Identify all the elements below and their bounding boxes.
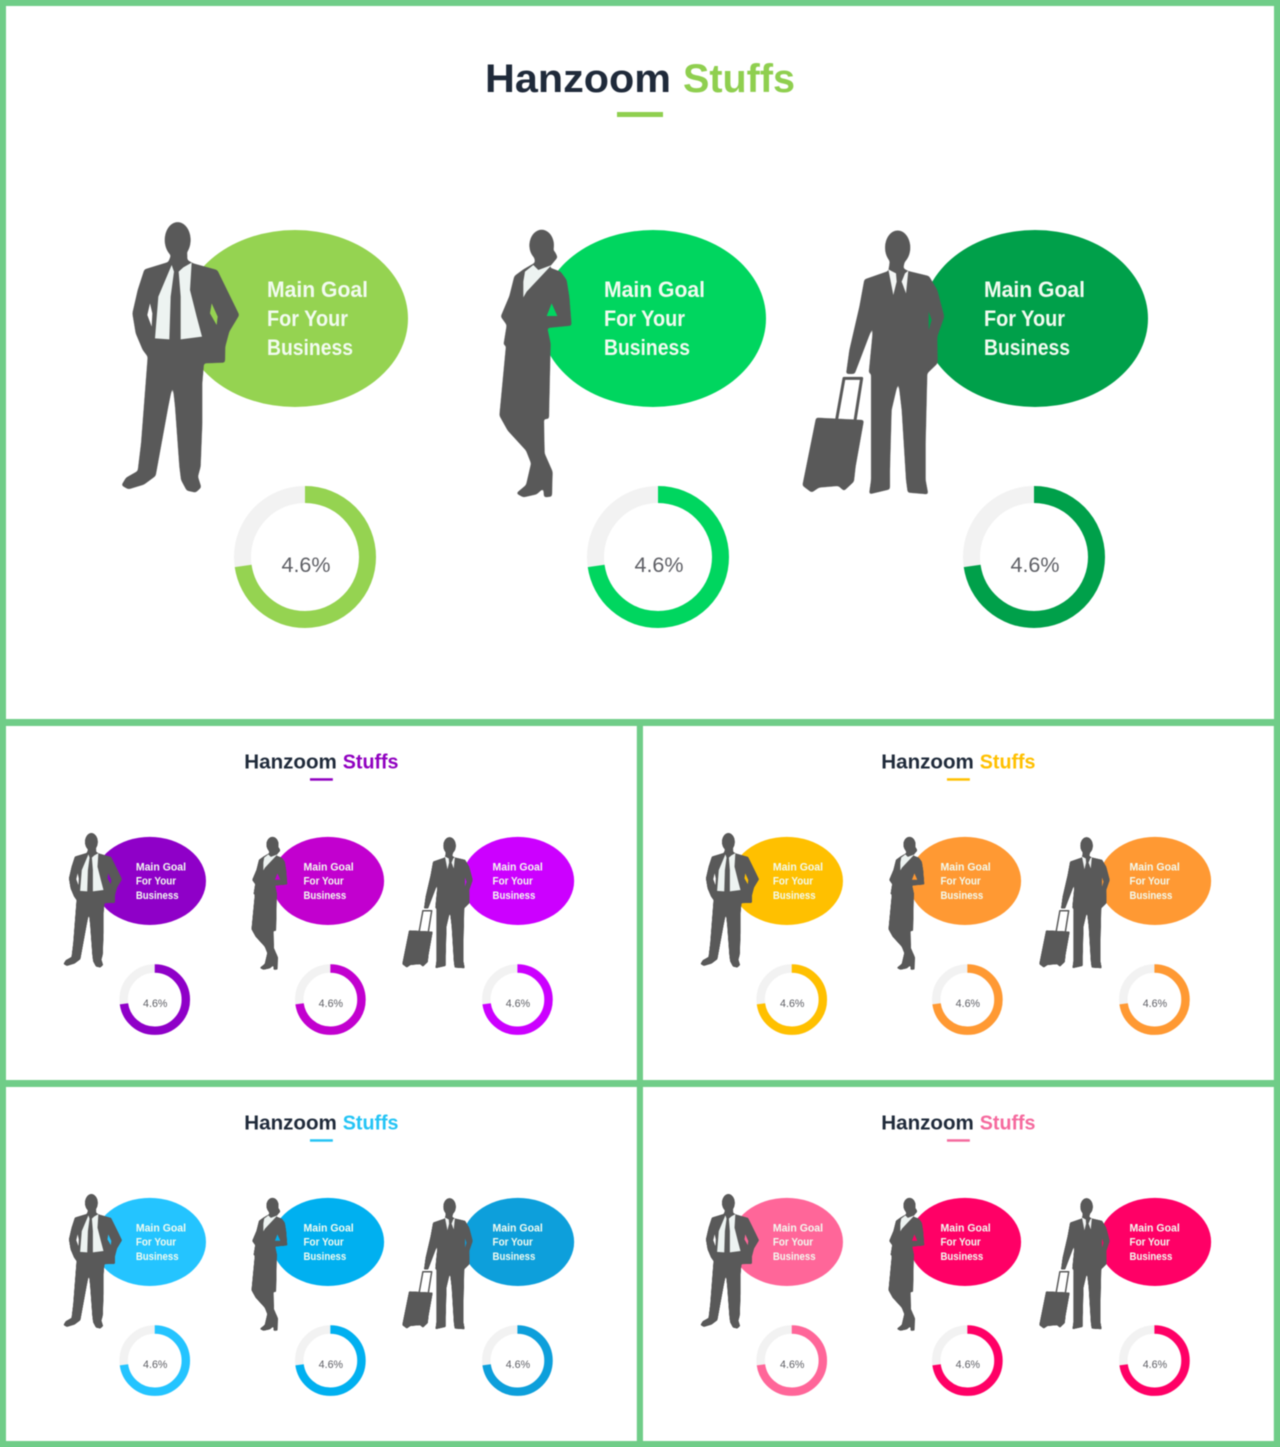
- panel: blue slide: [6, 1087, 637, 1441]
- goal bubble 2: Business: [940, 890, 983, 902]
- donut chart 2: [299, 1330, 361, 1392]
- goal bubble 2: For Your: [604, 306, 685, 331]
- title underline: [310, 1139, 333, 1142]
- donut chart 1: 4.6%: [281, 553, 331, 577]
- goal bubble 2: [272, 1198, 384, 1286]
- title: [881, 1112, 1036, 1134]
- goal bubble 1: Main Goal: [773, 861, 823, 873]
- panel: main green slide: [6, 6, 1274, 719]
- donut chart 1: 4.6%: [143, 998, 168, 1010]
- goal bubble 2: Main Goal: [303, 861, 354, 873]
- title: Stuffs: [683, 57, 795, 101]
- goal bubble 3: [1099, 837, 1211, 925]
- goal bubble 1: For Your: [773, 876, 814, 888]
- goal bubble 1: [94, 1198, 206, 1286]
- goal bubble 2: Business: [604, 335, 690, 360]
- icon: businesswoman: [251, 837, 287, 970]
- donut chart 3: [972, 494, 1096, 620]
- title: Stuffs: [980, 751, 1036, 773]
- goal bubble 2: [540, 230, 766, 407]
- donut chart 1: 4.6%: [780, 1359, 805, 1371]
- goal bubble 1: Business: [136, 890, 179, 902]
- goal bubble 1: [182, 230, 408, 407]
- goal bubble 3: Business: [493, 1251, 535, 1263]
- donut chart 1: 4.6%: [780, 998, 805, 1010]
- icon: businessman with hands in pockets: [700, 833, 759, 968]
- title underline: [310, 778, 333, 781]
- goal bubble 1: Business: [773, 1251, 816, 1263]
- title: [244, 1112, 399, 1134]
- donut chart 3: 4.6%: [1143, 1359, 1168, 1371]
- goal bubble 3: Business: [1130, 1251, 1172, 1263]
- goal bubble 3: [462, 1198, 574, 1286]
- goal bubble 3: Main Goal: [984, 277, 1085, 302]
- goal bubble 1: Main Goal: [136, 861, 186, 873]
- panel: purple slide: [6, 726, 637, 1080]
- goal bubble 3: Business: [984, 335, 1070, 360]
- icon: businessman with hands in pockets: [700, 1194, 759, 1329]
- panel: pink slide: [643, 1087, 1274, 1441]
- icon: businessman with hands in pockets: [121, 222, 239, 493]
- donut chart 3: [486, 969, 549, 1031]
- donut chart 3: [486, 1330, 549, 1392]
- goal bubble 1: Main Goal: [136, 1222, 186, 1234]
- goal bubble 3: Main Goal: [493, 1222, 543, 1234]
- donut chart 2: [299, 969, 361, 1031]
- panel: orange slide: [643, 726, 1274, 1080]
- title: Hanzoom: [881, 751, 974, 773]
- title: Stuffs: [980, 1112, 1036, 1134]
- goal bubble 1: For Your: [136, 876, 177, 888]
- goal bubble 2: For Your: [940, 876, 981, 888]
- goal bubble 2: [272, 837, 384, 925]
- donut chart 2: 4.6%: [319, 1359, 344, 1371]
- title underline: [947, 1139, 970, 1142]
- icon: businessman with hands in pockets: [63, 1194, 122, 1329]
- donut chart 3: [1123, 1330, 1186, 1392]
- donut chart 1: [761, 1330, 823, 1392]
- goal bubble 2: [909, 837, 1021, 925]
- goal bubble 3: [462, 837, 574, 925]
- goal bubble 1: Business: [136, 1251, 179, 1263]
- goal bubble 1: Business: [267, 335, 353, 360]
- donut chart 2: 4.6%: [634, 553, 684, 577]
- donut chart 1: 4.6%: [143, 1359, 168, 1371]
- donut chart 3: 4.6%: [1143, 998, 1168, 1010]
- donut chart 2: 4.6%: [956, 1359, 981, 1371]
- goal bubble 3: Main Goal: [1130, 861, 1180, 873]
- goal bubble 3: For Your: [1130, 876, 1171, 888]
- title: Stuffs: [343, 1112, 399, 1134]
- icon: businesswoman: [499, 230, 572, 497]
- donut chart 2: [936, 1330, 998, 1392]
- goal bubble 3: [922, 230, 1148, 407]
- icon: businessman with luggage: [402, 1198, 473, 1329]
- goal bubble 2: Business: [940, 1251, 983, 1263]
- donut chart 1: [242, 494, 368, 620]
- title: [881, 751, 1036, 773]
- goal bubble 1: [731, 1198, 843, 1286]
- title: [244, 751, 399, 773]
- goal bubble 3: Main Goal: [493, 861, 543, 873]
- icon: businessman with luggage: [1039, 837, 1110, 968]
- goal bubble 2: Business: [303, 1251, 346, 1263]
- goal bubble 1: [94, 837, 206, 925]
- title underline: [947, 778, 970, 781]
- title: Hanzoom: [244, 1112, 337, 1134]
- donut chart 3: [1123, 969, 1186, 1031]
- goal bubble 2: For Your: [303, 1237, 344, 1249]
- donut chart 2: 4.6%: [956, 998, 981, 1010]
- goal bubble 3: For Your: [1130, 1237, 1171, 1249]
- icon: businesswoman: [251, 1198, 287, 1331]
- goal bubble 1: For Your: [267, 306, 348, 331]
- goal bubble 1: For Your: [136, 1237, 177, 1249]
- donut chart 3: 4.6%: [1010, 553, 1060, 577]
- goal bubble 2: Main Goal: [940, 861, 991, 873]
- icon: businessman with luggage: [1039, 1198, 1110, 1329]
- icon: businessman with luggage: [802, 230, 944, 494]
- donut chart 1: [124, 1330, 186, 1392]
- icon: businessman with luggage: [402, 837, 473, 968]
- goal bubble 1: Main Goal: [267, 277, 368, 302]
- goal bubble 3: Main Goal: [1130, 1222, 1180, 1234]
- goal bubble 2: Main Goal: [303, 1222, 354, 1234]
- goal bubble 2: For Your: [940, 1237, 981, 1249]
- title: Stuffs: [343, 751, 399, 773]
- title: Hanzoom: [244, 751, 337, 773]
- donut chart 3: 4.6%: [506, 998, 531, 1010]
- donut chart 3: 4.6%: [506, 1359, 531, 1371]
- title underline: [617, 112, 663, 117]
- donut chart 1: [761, 969, 823, 1031]
- donut chart 1: [124, 969, 186, 1031]
- goal bubble 3: [1099, 1198, 1211, 1286]
- icon: businesswoman: [888, 1198, 924, 1331]
- goal bubble 3: For Your: [493, 876, 534, 888]
- goal bubble 1: For Your: [773, 1237, 814, 1249]
- goal bubble 1: Business: [773, 890, 816, 902]
- donut chart 2: [596, 494, 720, 620]
- donut chart 2: [936, 969, 998, 1031]
- goal bubble 2: For Your: [303, 876, 344, 888]
- goal bubble 1: [731, 837, 843, 925]
- goal bubble 2: [909, 1198, 1021, 1286]
- icon: businesswoman: [888, 837, 924, 970]
- goal bubble 2: Business: [303, 890, 346, 902]
- goal bubble 3: Business: [1130, 890, 1172, 902]
- title: Hanzoom: [485, 57, 671, 101]
- goal bubble 3: Business: [493, 890, 535, 902]
- donut chart 2: 4.6%: [319, 998, 344, 1010]
- title: [485, 57, 795, 101]
- title: Hanzoom: [881, 1112, 974, 1134]
- goal bubble 3: For Your: [984, 306, 1065, 331]
- goal bubble 3: For Your: [493, 1237, 534, 1249]
- goal bubble 2: Main Goal: [604, 277, 705, 302]
- goal bubble 1: Main Goal: [773, 1222, 823, 1234]
- icon: businessman with hands in pockets: [63, 833, 122, 968]
- goal bubble 2: Main Goal: [940, 1222, 991, 1234]
